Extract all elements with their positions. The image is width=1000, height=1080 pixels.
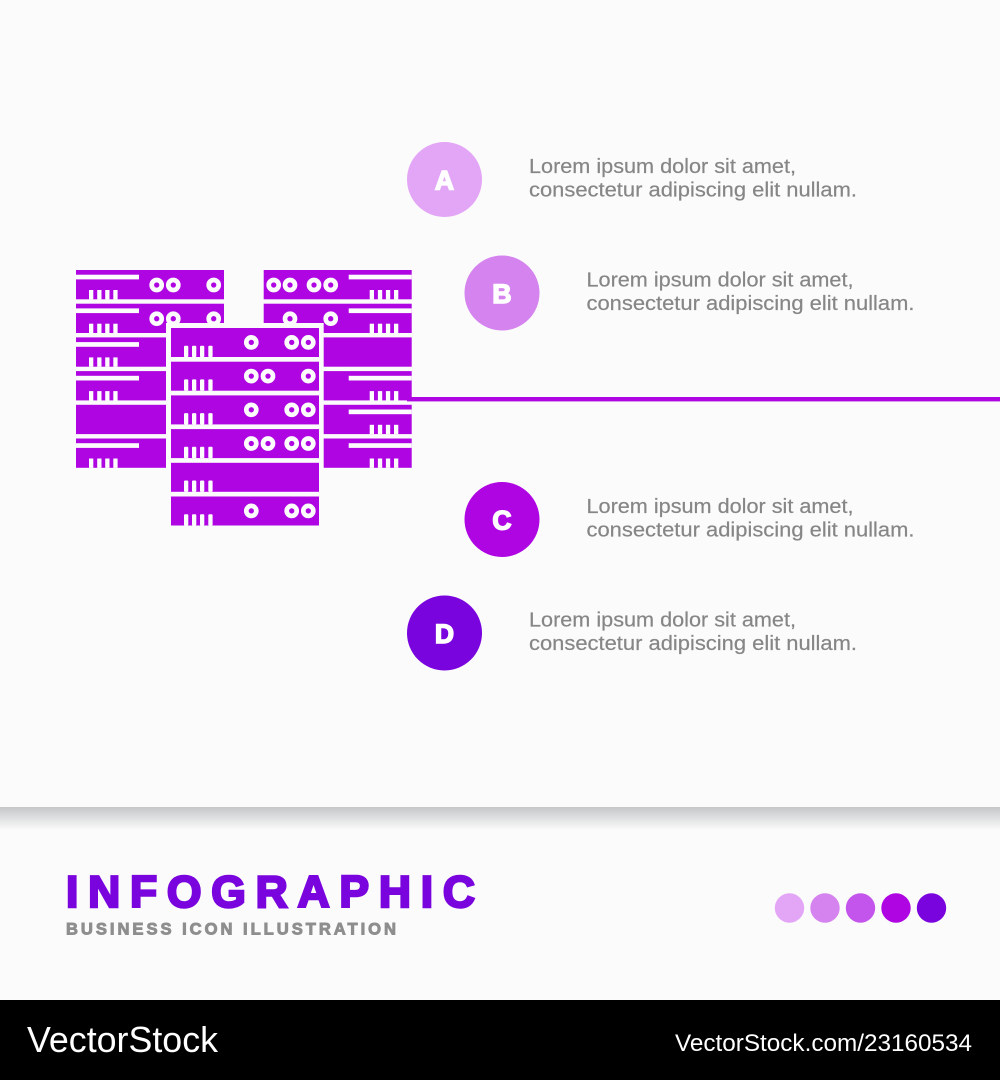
left server stack: [76, 270, 224, 468]
text B: Lorem ipsum dolor sit amet,: [586, 270, 854, 292]
text A: consectetur adipiscing elit nullam.: [529, 180, 857, 202]
text D: consectetur adipiscing elit nullam.: [529, 633, 857, 655]
watermark url: VectorStock.com/23160534: [675, 1030, 972, 1057]
title: INFOGRAPHIC: [66, 868, 475, 917]
item B: [464, 256, 914, 330]
watermark logo: VectorStock: [27, 1019, 219, 1060]
connector line: [407, 397, 1000, 401]
badge B: [464, 256, 540, 330]
text C: Lorem ipsum dolor sit amet,: [586, 496, 854, 518]
item A: [407, 142, 857, 217]
item D: [407, 596, 857, 670]
text D: Lorem ipsum dolor sit amet,: [529, 610, 796, 632]
text C: [586, 496, 914, 542]
badge C: C: [492, 506, 512, 536]
badge A: [407, 142, 482, 217]
text A: [529, 156, 857, 202]
colour dots: [775, 893, 946, 923]
badge B: B: [492, 279, 512, 309]
footer shadow band: [0, 807, 1000, 830]
text B: [586, 270, 914, 315]
text A: Lorem ipsum dolor sit amet,: [529, 156, 796, 178]
text C: consectetur adipiscing elit nullam.: [586, 520, 914, 542]
text D: [529, 610, 857, 655]
right server stack: [264, 270, 412, 468]
watermark bar: [0, 1000, 1000, 1080]
item C: [464, 482, 914, 557]
badge A: A: [435, 166, 454, 196]
centre server stack: [166, 323, 324, 530]
icon: server racks: [76, 270, 412, 530]
badge D: D: [435, 619, 454, 649]
subtitle: BUSINESS ICON ILLUSTRATION: [66, 920, 396, 939]
text B: consectetur adipiscing elit nullam.: [586, 293, 914, 315]
badge D: [407, 596, 482, 670]
badge C: [464, 482, 540, 557]
